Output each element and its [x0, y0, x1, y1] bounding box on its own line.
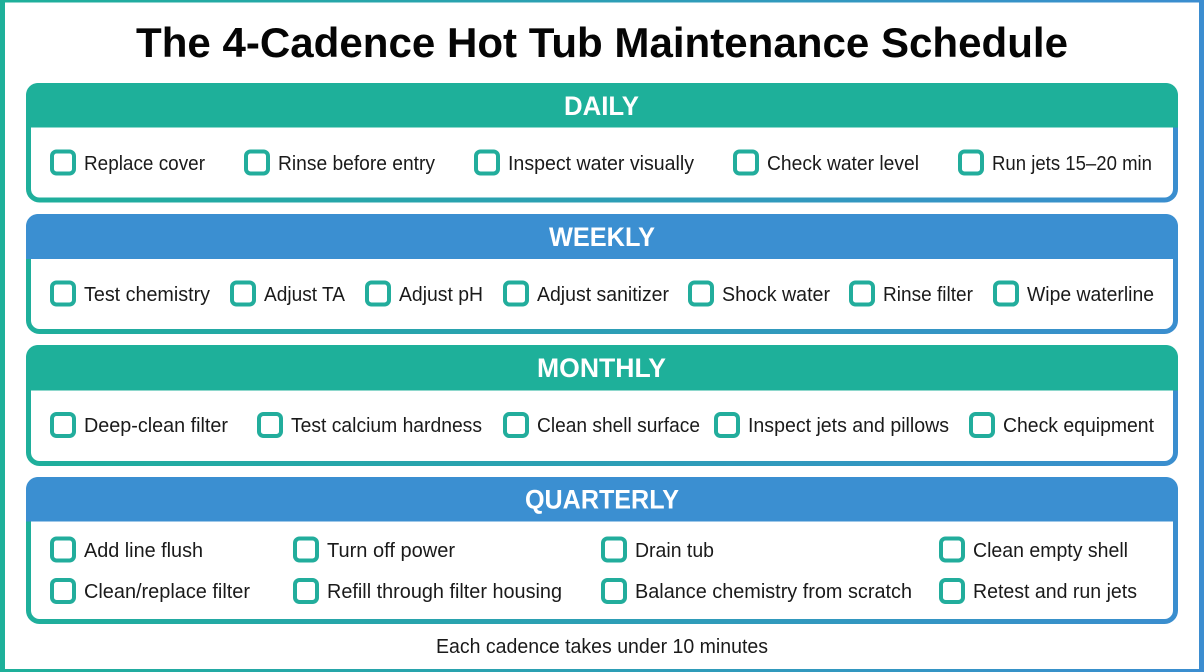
- panel: monthly: [26, 345, 1178, 464]
- footer note: Each cadence takes under 10 minutes: [436, 636, 768, 658]
- item: rinse filter: Rinse filter: [883, 284, 973, 306]
- panel: quarterly: [26, 477, 1178, 622]
- daily heading: DAILY: [564, 91, 639, 121]
- quarterly heading: QUARTERLY: [525, 484, 679, 514]
- monthly header band: [26, 345, 1178, 390]
- item: clean empty shell: Clean empty shell: [973, 540, 1128, 562]
- item: check water level: Check water level: [767, 153, 919, 175]
- title: The 4-Cadence Hot Tub Maintenance Schedule: [136, 19, 1068, 66]
- item: adjust TA: Adjust TA: [264, 284, 346, 306]
- panel: weekly: [26, 214, 1178, 332]
- item: clean/replace filter: Clean/replace filter: [84, 581, 250, 603]
- daily header band: [26, 83, 1178, 128]
- panel: daily: [26, 83, 1178, 200]
- quarterly header band: [26, 477, 1178, 522]
- item: replace cover: Replace cover: [84, 153, 205, 175]
- item: clean shell surface: Clean shell surface: [537, 415, 700, 437]
- item: shock water: Shock water: [722, 284, 830, 306]
- item: check equipment: Check equipment: [1003, 415, 1154, 437]
- item: drain tub: [603, 538, 714, 562]
- item: adjust TA: [232, 282, 346, 306]
- item: test chemistry: Test chemistry: [84, 284, 210, 306]
- item: rinse filter: [851, 282, 973, 306]
- item: inspect water visually: Inspect water visually: [508, 153, 694, 175]
- item: refill through filter housing: Refill through filter housing: [327, 581, 562, 603]
- item: adjust pH: Adjust pH: [399, 284, 483, 306]
- item: deep-clean filter: Deep-clean filter: [84, 415, 228, 437]
- item: test calcium hardness: Test calcium hardness: [291, 415, 482, 437]
- weekly heading: WEEKLY: [549, 222, 655, 252]
- monthly heading: MONTHLY: [537, 353, 666, 383]
- item: adjust sanitizer: Adjust sanitizer: [537, 284, 669, 306]
- item: adjust pH: [367, 282, 483, 306]
- item: inspect jets and pillows: Inspect jets and pillows: [748, 415, 949, 437]
- item: balance chemistry from scratch: Balance chemistry from scratch: [635, 581, 912, 603]
- item: retest and run jets: Retest and run jets: [973, 581, 1137, 603]
- item: rinse before entry: Rinse before entry: [278, 153, 435, 175]
- item: drain tub: Drain tub: [635, 540, 714, 562]
- item: run jets: Run jets 15–20 min: [992, 153, 1152, 175]
- item: wipe waterline: Wipe waterline: [1027, 284, 1154, 306]
- item: add line flush: Add line flush: [84, 540, 203, 562]
- weekly header band: [26, 214, 1178, 259]
- item: turn off power: Turn off power: [327, 540, 455, 562]
